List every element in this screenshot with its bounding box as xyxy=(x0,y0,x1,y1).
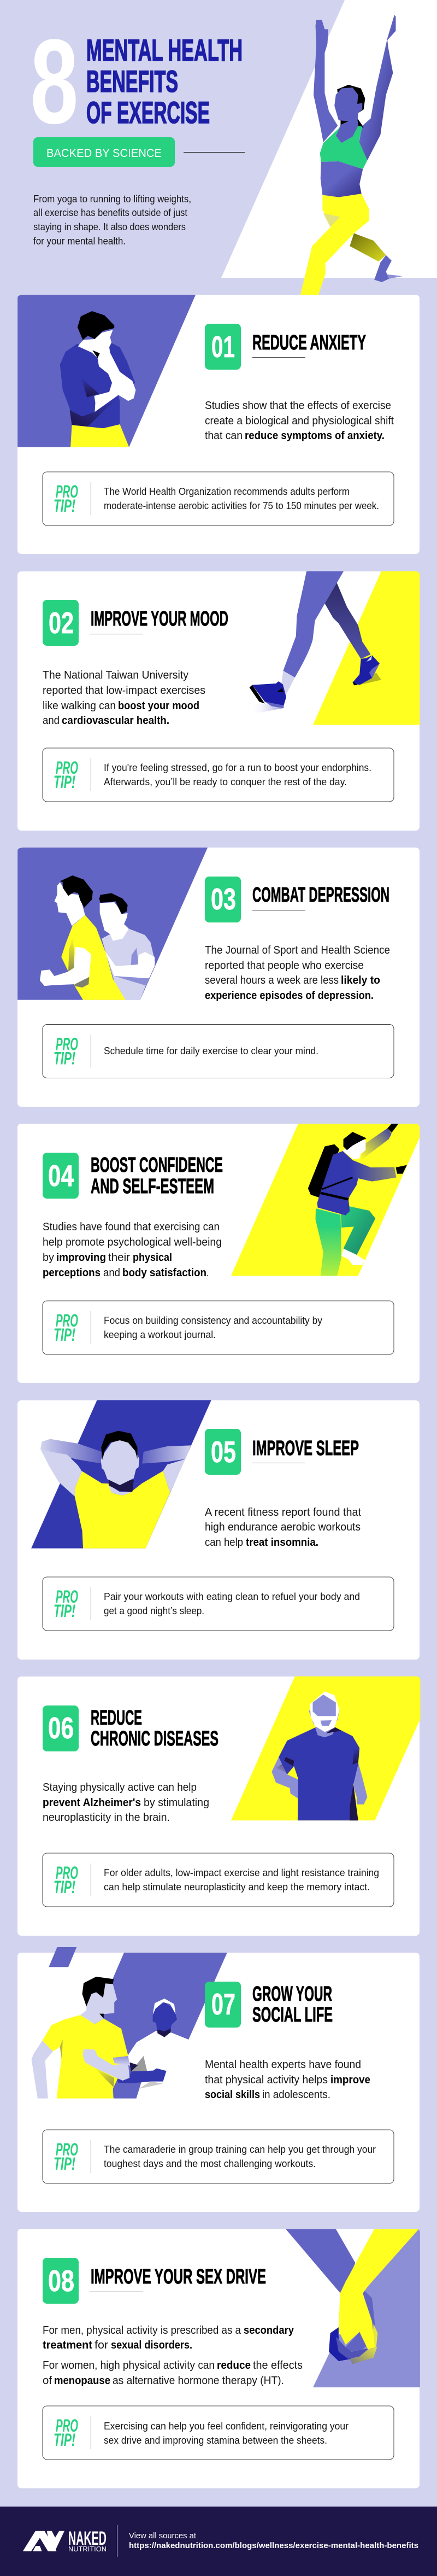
body text xyxy=(43,1781,209,1824)
body text: Staying physically active can help xyxy=(43,1781,197,1794)
sources text: View all sources at xyxy=(129,2531,197,2540)
heading xyxy=(91,1707,218,1750)
body text xyxy=(43,1220,222,1279)
body text: reduce xyxy=(217,2359,251,2371)
body text: that can xyxy=(205,429,243,442)
pro tip: TIP! xyxy=(54,1325,75,1345)
pro tip: can help stimulate neuroplasticity and keep the memory intact. xyxy=(104,1881,370,1892)
intro text: for your mental health. xyxy=(33,236,126,247)
number badge 03 xyxy=(205,877,241,922)
body text: A recent fitness report found that xyxy=(205,1506,361,1518)
sources text: https://nakednutrition.com/blogs/wellness/exercise-mental-health-benefits xyxy=(129,2541,418,2550)
body text: improving xyxy=(56,1251,106,1264)
pro tip: Afterwards, you’ll be ready to conquer the rest of the day. xyxy=(104,776,347,787)
illustration: walking legs xyxy=(250,571,420,725)
number badge 02 xyxy=(43,600,79,646)
body text: several hours a week are less xyxy=(205,974,339,986)
body text: treatment xyxy=(43,2339,92,2351)
heading: REDUCE ANXIETY xyxy=(252,331,366,354)
title: OF EXERCISE xyxy=(86,95,210,130)
number badge 06 xyxy=(43,1705,79,1751)
pro tip: get a good night’s sleep. xyxy=(104,1605,204,1616)
pro tip: TIP! xyxy=(54,2430,75,2450)
heading: IMPROVE YOUR SEX DRIVE xyxy=(91,2265,266,2288)
body text: . xyxy=(206,1266,209,1279)
number badge 01: 01 xyxy=(211,330,235,364)
pro tip: sex drive and improving stamina between the sheets. xyxy=(104,2434,327,2446)
body text: likely to xyxy=(341,974,380,986)
pro tip: PRO xyxy=(56,1863,78,1883)
card 4: boost confidence xyxy=(17,1124,420,1383)
pro tip: toughest days and the most challenging workouts. xyxy=(104,2158,316,2169)
pro tip: keeping a workout journal. xyxy=(104,1329,216,1340)
body text xyxy=(205,2058,370,2101)
title xyxy=(86,33,243,130)
body text: cardiovascular health. xyxy=(62,714,169,727)
card background xyxy=(17,2229,420,2488)
body text: create a biological and physiological shift xyxy=(205,414,394,427)
body text: boost your mood xyxy=(118,699,199,712)
body text: their xyxy=(108,1251,130,1264)
body text: Mental health experts have found xyxy=(205,2058,361,2071)
pro tip: PRO xyxy=(56,1311,78,1330)
card 8: improve your sex drive xyxy=(17,2229,420,2488)
illustration: two men training xyxy=(32,1947,227,2100)
body text: secondary xyxy=(244,2324,294,2336)
pro tip xyxy=(43,1301,394,1354)
logo mark xyxy=(23,2531,64,2551)
card background xyxy=(17,1124,420,1383)
heading: BOOST CONFIDENCE xyxy=(91,1154,223,1177)
body text xyxy=(43,669,205,727)
logo wordmark: NUTRITION xyxy=(68,2545,107,2553)
body text: Studies have found that exercising can xyxy=(43,1220,220,1233)
card 7: grow your social life xyxy=(17,1947,420,2212)
heading: GROW YOUR xyxy=(252,1983,332,2006)
body text: and xyxy=(43,714,60,727)
pro tip: The World Health Organization recommends adults perform xyxy=(104,486,350,497)
pro tip: TIP! xyxy=(54,1601,75,1621)
heading: SOCIAL LIFE xyxy=(252,2003,333,2026)
number badge 01 xyxy=(205,324,241,370)
body text: The National Taiwan University xyxy=(43,669,189,681)
body text: physical xyxy=(133,1251,172,1264)
heading: REDUCE xyxy=(91,1707,142,1730)
pro tip: PRO xyxy=(56,482,78,501)
body text xyxy=(43,2324,303,2387)
card background xyxy=(17,1953,420,2212)
card background xyxy=(17,295,420,554)
body text: in adolescents. xyxy=(262,2088,330,2101)
pro tip: PRO xyxy=(56,2140,78,2159)
number badge 08 xyxy=(43,2258,79,2304)
pro tip: PRO xyxy=(56,758,78,778)
big numeral 8: 8 xyxy=(31,14,79,149)
pro tip xyxy=(43,1577,394,1631)
body text: reported that low-impact exercises xyxy=(43,684,205,697)
illustration: woman with raised arms xyxy=(300,15,403,295)
title: BENEFITS xyxy=(86,64,178,98)
number badge 02: 02 xyxy=(49,606,74,640)
pro tip: Focus on building consistency and accountability by xyxy=(104,1315,323,1326)
number badge 03: 03 xyxy=(211,882,236,916)
header section xyxy=(31,0,437,295)
body text: like walking can xyxy=(43,699,116,712)
number badge 07: 07 xyxy=(211,1987,235,2021)
pro tip: Exercising can help you feel confident, reinvigorating your xyxy=(104,2420,349,2432)
heading: AND SELF-ESTEEM xyxy=(91,1175,214,1198)
body text: perceptions xyxy=(43,1266,101,1279)
body text: by stimulating xyxy=(144,1796,209,1809)
body text: The Journal of Sport and Health Science xyxy=(205,944,390,956)
heading: IMPROVE SLEEP xyxy=(252,1437,359,1460)
body text: For men, physical activity is prescribed as a xyxy=(43,2324,241,2336)
heading xyxy=(91,1154,223,1198)
heading xyxy=(252,1983,333,2026)
body text: by xyxy=(43,1251,55,1264)
card 1: reduce anxiety xyxy=(17,295,420,554)
illustration: older man xyxy=(231,1677,420,1820)
body text: reduce symptoms of anxiety. xyxy=(245,429,385,442)
pro tip xyxy=(43,1025,394,1078)
logo wordmark: NAKED xyxy=(68,2528,107,2549)
heading rule xyxy=(252,357,305,358)
badge rule xyxy=(184,152,245,153)
body text: neuroplasticity in the brain. xyxy=(43,1811,170,1824)
card 5: improve sleep xyxy=(17,1400,420,1660)
badge: backed by science xyxy=(33,137,175,167)
card 3: combat depression xyxy=(17,848,420,1107)
pro tip: TIP! xyxy=(54,772,75,792)
number badge 05: 05 xyxy=(211,1435,236,1469)
body text: and xyxy=(103,1266,120,1279)
number badge 05 xyxy=(205,1429,241,1475)
intro text: all exercise has benefits outside of just xyxy=(33,207,187,218)
intro text: staying in shape. It also does wonders xyxy=(33,221,186,232)
body text: for xyxy=(95,2339,108,2351)
card background xyxy=(17,848,420,1107)
body text: reported that people who exercise xyxy=(205,959,364,972)
pro tip xyxy=(43,2130,394,2183)
pro tip: The camaraderie in group training can help you get through your xyxy=(104,2143,376,2155)
body text: as alternative hormone therapy (HT). xyxy=(113,2374,284,2387)
number badge 06: 06 xyxy=(48,1711,74,1745)
badge: backed by science: BACKED BY SCIENCE xyxy=(46,147,162,160)
pro tip: PRO xyxy=(56,1587,78,1607)
body text xyxy=(205,399,394,442)
pro tip xyxy=(43,472,394,525)
body text: that physical activity helps xyxy=(205,2073,328,2086)
body text: the effects xyxy=(253,2359,303,2371)
body text: can help xyxy=(205,1536,243,1549)
illustration: two runners xyxy=(17,848,208,1000)
number badge 08: 08 xyxy=(48,2264,74,2298)
pro tip xyxy=(43,1853,394,1907)
card 6: reduce chronic diseases xyxy=(17,1677,420,1936)
pro tip: TIP! xyxy=(54,496,75,516)
illustration: climber xyxy=(231,1124,420,1276)
body text: high endurance aerobic workouts xyxy=(205,1521,361,1533)
intro text: From yoga to running to lifting weights, xyxy=(33,194,191,205)
footer background xyxy=(0,2507,437,2576)
body text: menopause xyxy=(54,2374,110,2387)
illustration: holding hands xyxy=(286,2229,420,2387)
pro tip: Pair your workouts with eating clean to refuel your body and xyxy=(104,1591,360,1602)
pro tip: PRO xyxy=(56,2416,78,2435)
logo wordmark xyxy=(68,2528,107,2553)
pro tip: TIP! xyxy=(54,1877,75,1897)
title: MENTAL HEALTH xyxy=(86,33,243,67)
footer xyxy=(0,2507,437,2576)
number badge 07 xyxy=(205,1982,241,2028)
body text xyxy=(205,1506,361,1549)
body text: prevent Alzheimer's xyxy=(43,1796,141,1809)
body text: Studies show that the effects of exercise xyxy=(205,399,391,412)
number badge 04 xyxy=(43,1153,79,1199)
pro tip: Schedule time for daily exercise to clear your mind. xyxy=(104,1045,318,1056)
illustration: anxious man xyxy=(17,295,196,447)
sources text xyxy=(129,2531,418,2550)
pro tip: TIP! xyxy=(54,1049,75,1068)
number badge 04: 04 xyxy=(48,1159,74,1193)
header white slanted panel xyxy=(221,0,437,278)
card background xyxy=(17,571,420,831)
heading: CHRONIC DISEASES xyxy=(91,1727,218,1750)
card 2: improve your mood xyxy=(17,571,420,831)
pro tip: moderate-intense aerobic activities for 75 to 150 minutes per week. xyxy=(104,500,379,511)
intro text xyxy=(33,194,191,247)
pro tip: For older adults, low-impact exercise and light resistance training xyxy=(104,1867,379,1878)
body text: experience episodes of depression. xyxy=(205,989,374,1002)
pro tip xyxy=(43,2406,394,2460)
body text: improve xyxy=(330,2073,370,2086)
body text xyxy=(205,944,390,1002)
body text: For women, high physical activity can xyxy=(43,2359,215,2371)
body text: sexual disorders. xyxy=(111,2339,192,2351)
illustration: man resting with hands behind head xyxy=(31,1400,211,1549)
pro tip: If you're feeling stressed, go for a run to boost your endorphins. xyxy=(104,762,371,773)
body text: help promote psychological well-being xyxy=(43,1236,222,1248)
body text: body satisfaction xyxy=(122,1266,206,1279)
pro tip xyxy=(43,748,394,802)
pro tip: PRO xyxy=(56,1035,78,1054)
body text: treat insomnia. xyxy=(246,1536,318,1549)
heading: IMPROVE YOUR MOOD xyxy=(91,608,228,630)
body text: social skills xyxy=(205,2088,260,2101)
pro tip: TIP! xyxy=(54,2154,75,2174)
card background xyxy=(17,1677,420,1936)
body text: of xyxy=(43,2374,52,2387)
card background xyxy=(17,1400,420,1660)
